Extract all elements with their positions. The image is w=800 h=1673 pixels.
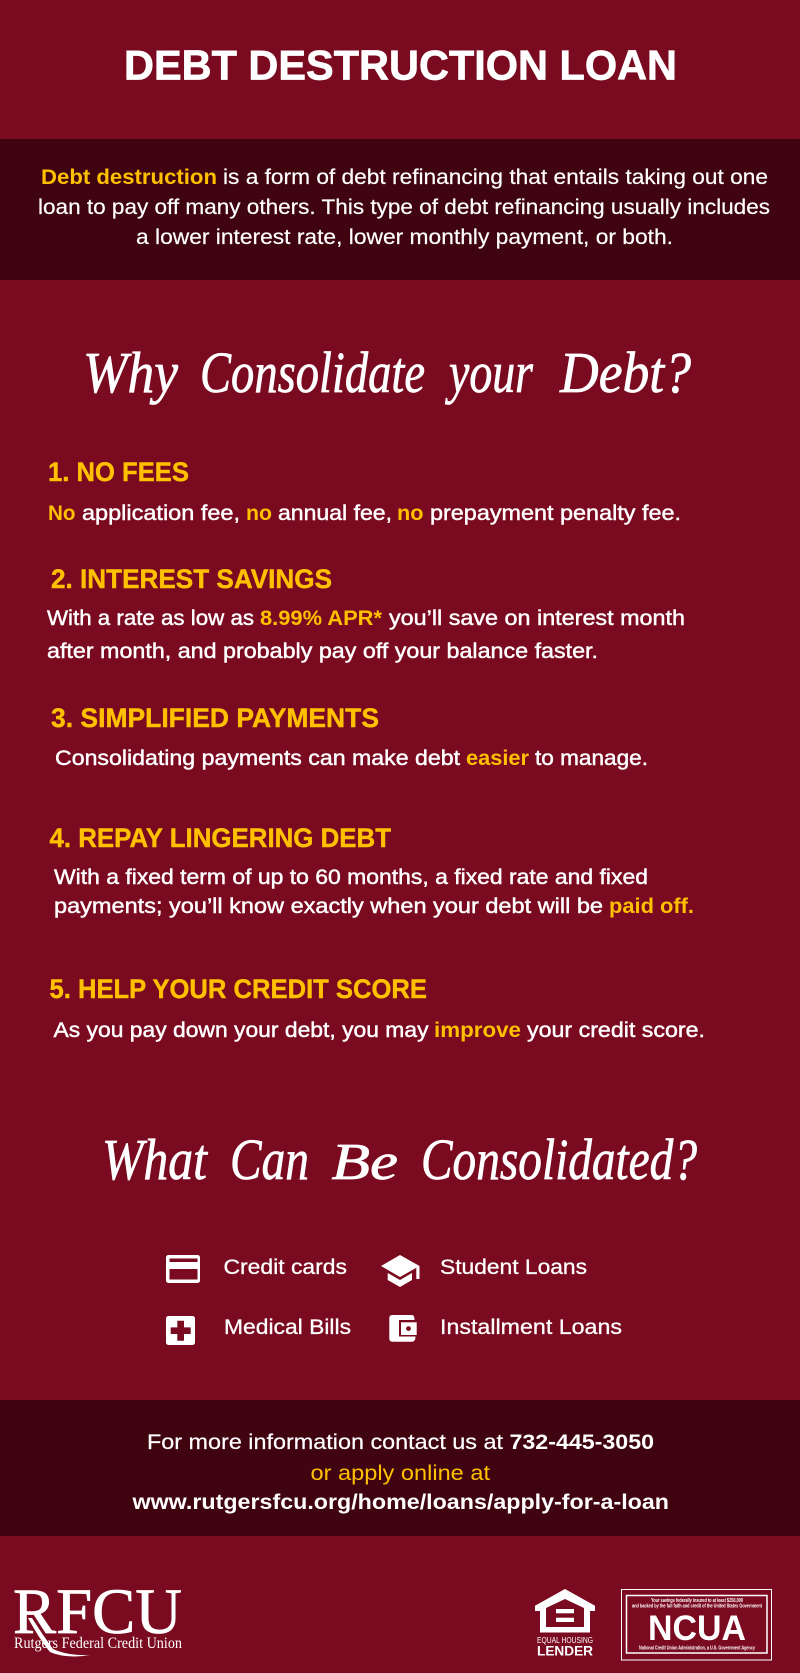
logo: NCUA: NCUA [648, 1609, 746, 1648]
heading: what can be consolidated: Consolidated? [421, 1127, 697, 1192]
heading: why consolidate: your [445, 340, 533, 405]
icon: credit card [166, 1255, 200, 1283]
heading: what can be consolidated: What [102, 1127, 209, 1192]
heading: what can be consolidated: Can [230, 1127, 309, 1192]
reason 2: interest savings [47, 564, 685, 663]
heading: why consolidate [83, 340, 691, 405]
reason 2: interest savings: 8.99% APR* [260, 607, 383, 630]
heading: why consolidate: Why [83, 340, 178, 405]
heading: what can be consolidated: Be [332, 1134, 398, 1191]
reason 5: help your credit score: improve [434, 1019, 521, 1042]
reason 5: help your credit score: As you pay down your debt, you may [54, 1019, 429, 1042]
reason 1: no fees: no [246, 502, 272, 525]
reason 1: no fees: prepayment penalty fee. [430, 502, 681, 525]
reason 4: repay lingering debt: With a fixed term of up to 60 months, a fixed rate and fixed [54, 866, 648, 889]
panel: intro definition [0, 139, 800, 280]
reason 5: help your credit score: 5. HELP YOUR CREDIT SCORE [50, 974, 427, 1004]
reason 4: repay lingering debt: 4. REPAY LINGERING DEBT [50, 823, 391, 853]
label: installment loans: Installment Loans [440, 1315, 622, 1339]
reason 4: repay lingering debt: payments; you’ll know exactly when your debt will be [54, 895, 603, 918]
reason 1: no fees: application fee, [82, 502, 240, 525]
panel: contact: www.rutgersfcu.org/home/loans/apply-for-a-loan [131, 1491, 669, 1514]
label: student loans: Student Loans [440, 1255, 587, 1279]
reason 2: interest savings: you’ll save on interest month [389, 607, 685, 630]
reason 2: interest savings: With a rate as low as [47, 607, 254, 630]
reason 3: simplified payments: easier [466, 747, 529, 770]
reason 1: no fees: annual fee, [278, 502, 392, 525]
reason 4: repay lingering debt [50, 823, 694, 918]
panel: contact: For more information contact us at [147, 1431, 503, 1454]
reason 1: no fees: no [397, 502, 424, 525]
panel: contact: or apply online at [310, 1462, 490, 1485]
logo: RFCU: RFCU [13, 1576, 182, 1648]
reason 2: interest savings: after month, and probably pay off your balance faster. [47, 640, 598, 663]
logo: RFCU: Rutgers Federal Credit Union [14, 1635, 182, 1652]
icon: medical cross [166, 1316, 195, 1345]
heading: why consolidate: Debt? [559, 340, 691, 405]
logo: NCUA [622, 1590, 772, 1660]
panel: intro definition: is a form of debt refinancing that entails taking out one [223, 165, 768, 189]
panel: contact [0, 1400, 800, 1536]
logo: NCUA: and backed by the full faith and credit of the United States Government [632, 1604, 762, 1610]
label: credit cards: Credit cards [224, 1255, 347, 1279]
title: DEBT DESTRUCTION LOAN [124, 42, 677, 88]
reason 3: simplified payments: to manage. [535, 747, 648, 770]
reason 2: interest savings: 2. INTEREST SAVINGS [51, 564, 332, 594]
logo: NCUA: Your savings federally insured to at least $250,000 [651, 1598, 743, 1604]
reason 3: simplified payments: 3. SIMPLIFIED PAYMENTS [51, 703, 379, 733]
reason 5: help your credit score: your credit score. [527, 1019, 705, 1042]
panel: intro definition: loan to pay off many others. This type of debt refinancing usually includes [38, 195, 770, 219]
label: medical bills: Medical Bills [224, 1315, 351, 1339]
panel: contact: 732-445-3050 [510, 1431, 654, 1454]
heading: why consolidate: Consolidate [200, 340, 425, 405]
reason 5: help your credit score [50, 974, 705, 1042]
icon: graduation cap [381, 1255, 420, 1287]
logo: NCUA: National Credit Union Administration, a U.S. Government Agency [639, 1646, 755, 1652]
reason 1: no fees: 1. NO FEES [48, 457, 189, 487]
icon: wallet [389, 1315, 417, 1342]
reason 3: simplified payments [51, 703, 648, 770]
reason 1: no fees [48, 457, 681, 525]
reason 1: no fees: No [48, 502, 76, 525]
logo: equal housing lender: LENDER [537, 1643, 593, 1659]
logo: equal housing lender [535, 1589, 595, 1659]
panel: intro definition: a lower interest rate, lower monthly payment, or both. [136, 225, 673, 249]
reason 4: repay lingering debt: paid off. [609, 895, 694, 918]
logo: equal housing lender: EQUAL HOUSING [537, 1635, 593, 1645]
reason 3: simplified payments: Consolidating payments can make debt [55, 747, 460, 770]
heading: what can be consolidated [102, 1127, 697, 1192]
panel: intro definition: Debt destruction [41, 165, 217, 189]
